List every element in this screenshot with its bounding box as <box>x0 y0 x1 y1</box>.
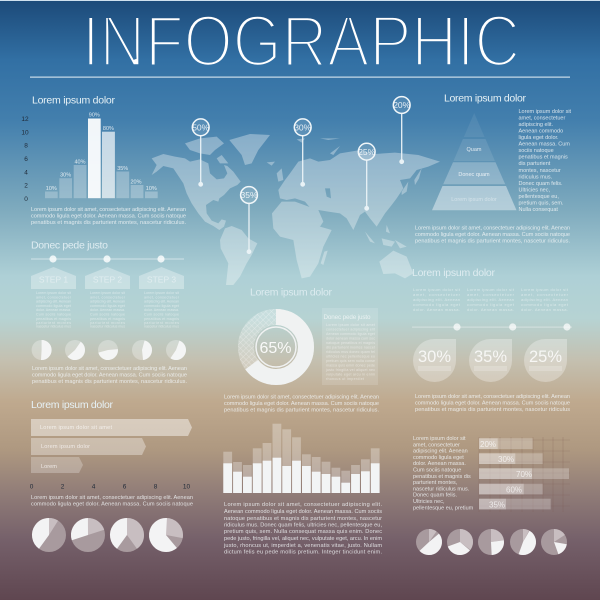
arrow 2 <box>31 438 146 455</box>
bar labels: 90% <box>89 112 100 118</box>
step 2: Cum sociis natoque <box>90 312 125 316</box>
bar labels <box>46 112 157 192</box>
side text: Ultricies nec, <box>413 499 445 505</box>
timeline <box>31 255 184 263</box>
pin: 50%: 50% <box>192 122 210 132</box>
step 1: penatibus et magnis <box>36 317 71 321</box>
side text: Cum sociis natoque <box>413 468 461 474</box>
x axis: 6 <box>123 484 127 490</box>
text block: commodo ligula eget dolor. Aenean massa. Cum sociis natoque <box>32 372 187 378</box>
callout box: Lorem ipsum dolor sit amet <box>326 323 375 327</box>
y axis: 8 <box>24 143 28 150</box>
arrow 3 <box>31 457 83 473</box>
text block: Lorem ipsum dolor sit amet, consectetuer adipiscing elit. Aenean <box>31 207 186 213</box>
callout box: Aenean commodo ligula eget <box>326 332 375 336</box>
text block: Lorem ipsum dolor sit amet, consectetuer adipiscing elit. <box>224 502 382 508</box>
columns text: commodo ligula eget <box>413 302 461 307</box>
text block: penatibus et magnis dis parturient montes, nascetur ridiculus. <box>224 407 379 413</box>
text block: Lorem ipsum dolor sit amet, consectetuer adipiscing elit. Aenean <box>224 394 379 400</box>
step 1: Lorem ipsum dolor sit <box>36 291 71 295</box>
step 3: Cum sociis natoque <box>144 312 179 316</box>
text block: Lorem ipsum dolor sit amet, consectetuer adipiscing elit. Aenean <box>31 495 193 501</box>
pin: 50% <box>192 119 210 187</box>
y axis <box>21 116 29 203</box>
text block: penatibus et magnis dis parturient montes, nascetur ridiculus. <box>415 238 570 244</box>
drop: 30% <box>413 339 456 382</box>
text block: pede justo, fringilla vel, aliquet nec, vulputate eget, arcu. In enim <box>224 536 382 542</box>
columns text: Lorem ipsum dolor sit <box>521 287 569 292</box>
columns text: adipiscing elit. Aenean <box>467 297 514 302</box>
text block <box>32 366 187 385</box>
text block: commodo ligula eget dolor. Aenean massa. Cum sociis natoque <box>224 401 379 407</box>
step 1 <box>31 267 76 329</box>
y axis: 0 <box>24 196 28 203</box>
bar labels: 10% <box>46 186 57 192</box>
callout box <box>322 308 378 385</box>
drop: 30%: 30% <box>418 348 451 366</box>
bars: 70% <box>516 470 532 479</box>
side text: penatibus et magnis dis <box>413 474 471 480</box>
callout box: massa quis enim donec pede <box>326 364 375 368</box>
columns text: Lorem ipsum dolor sit <box>467 287 515 292</box>
step 2: STEP 2 <box>93 274 122 284</box>
panel: horizontal bars <box>413 436 570 555</box>
step 1: dolor. Aenean massa. <box>36 308 71 312</box>
callout box: dis parturient montes nascet <box>326 346 375 350</box>
panel: stacked bars <box>223 424 382 556</box>
side text: pellentesque eu, pretium <box>413 505 474 511</box>
panel: bar chart <box>21 94 186 226</box>
x axis: 0 <box>30 484 34 490</box>
side text: amet, consectetuer <box>413 442 460 448</box>
world map <box>152 134 440 285</box>
callout box: ridiculus mus donec quam fel <box>326 350 375 354</box>
side text: sociis natoque <box>518 148 554 154</box>
text block: Aenean commodo ligula eget dolor. Aenean massa. Cum sociis <box>224 509 382 515</box>
text block: Lorem ipsum dolor sit amet, consectetuer adipiscing elit. Aenean <box>32 366 187 372</box>
pie row <box>416 529 567 555</box>
text block <box>31 495 193 507</box>
map pins <box>192 97 411 254</box>
side text: montes, nascetur <box>518 168 561 174</box>
side text: ligula eget dolor. <box>518 135 559 141</box>
heading: Lorem ipsum dolor <box>31 399 114 411</box>
columns text: commodo ligula eget <box>521 302 569 307</box>
columns text: amet, consectetuer <box>467 292 515 297</box>
columns text: adipiscing elit. Aenean <box>413 297 460 302</box>
arrow 3: Lorem <box>41 464 57 470</box>
side text: pretium quis, sem. <box>518 200 564 206</box>
step 2: penatibus et magnis <box>90 317 125 321</box>
pin: 20% <box>393 97 411 164</box>
text block: penatibus et magnis dis parturient montes, nascetur ridiculus. <box>32 379 187 385</box>
bar labels: 20% <box>130 180 142 186</box>
x axis: 8 <box>154 484 158 490</box>
columns text: Lorem ipsum dolor sit <box>413 287 461 292</box>
step 2: adipiscing elit. Aenean <box>90 300 125 304</box>
large pies <box>32 518 183 552</box>
text block: commodo ligula eget dolor. Aenean massa. Cum sociis natoque <box>415 232 570 238</box>
step 1: nascetur ridiculus mus <box>36 325 71 329</box>
step 3: parturient montes <box>144 321 179 325</box>
bars <box>479 438 569 510</box>
y axis: 10 <box>21 129 29 136</box>
step 3: STEP 3 <box>147 274 176 284</box>
panel: drops <box>412 267 572 413</box>
columns text: amet, consectetuer <box>413 292 461 297</box>
callout box: dolor aenean massa cum soc <box>326 336 375 340</box>
bar labels: 80% <box>103 126 114 132</box>
side text: Donec quam felis. <box>413 493 457 499</box>
y axis: 2 <box>24 183 28 190</box>
heading: Lorem ipsum dolor <box>444 92 526 104</box>
step 2: amet, consectetuer <box>90 295 126 299</box>
side text: Lorem ipsum dolor sit <box>518 109 572 115</box>
side text: dolor. Aenean massa. <box>413 461 466 467</box>
pin: 30% <box>294 119 312 187</box>
y axis: 6 <box>24 156 28 163</box>
bars <box>45 118 158 198</box>
step 1: adipiscing elit. Aenean <box>36 300 71 304</box>
side text: ridiculus mus. <box>518 174 553 180</box>
step 3: commodo ligula eget <box>144 304 179 308</box>
pin: 25% <box>358 143 376 211</box>
text block: penatibus et magnis dis parturient montes, nascetur ridiculus. <box>31 220 186 226</box>
text block <box>31 207 186 226</box>
bar labels: 30% <box>60 172 71 178</box>
grid <box>479 437 570 512</box>
drop: 25% <box>524 339 567 382</box>
side text <box>518 109 572 213</box>
callout box: rhoncus ut imperdiet <box>326 377 364 381</box>
step 3: amet, consectetuer <box>144 295 180 299</box>
x axis: 10 <box>183 484 190 490</box>
y axis: 12 <box>21 116 29 123</box>
pin: 35%: 35% <box>240 190 258 200</box>
side text: commodo ligula eget <box>413 455 464 461</box>
side text: Aenean massa. Cum <box>518 142 570 148</box>
columns text: adipiscing elit. Aenean <box>521 297 568 302</box>
text block <box>415 226 570 244</box>
arrow 1: Lorem ipsum dolor sit amet <box>40 425 112 431</box>
step 3: Lorem ipsum dolor sit <box>144 291 179 295</box>
columns text: dolor. Aenean massa. <box>467 307 514 312</box>
side text: Lorem ipsum dolor sit <box>413 436 466 442</box>
x axis <box>30 484 190 490</box>
pin: 35% <box>240 187 258 254</box>
heading: Donec pede justo <box>31 240 108 252</box>
step 2: parturient montes <box>90 321 125 325</box>
step 1: parturient montes <box>36 321 71 325</box>
text block: commodo ligula eget dolor. Aenean massa. Cum sociis natoque <box>31 501 193 507</box>
step 2: nascetur ridiculus mus <box>90 325 125 329</box>
text block: Lorem ipsum dolor sit amet, consectetuer adipiscing elit. Aenean <box>415 226 570 232</box>
callout box: pretium quis sem nulla conse <box>326 359 375 363</box>
step 2: commodo ligula eget <box>90 304 125 308</box>
bar labels: 40% <box>74 160 86 166</box>
columns text: dolor. Aenean massa. <box>413 307 460 312</box>
text block: pretium quis, sem. Nulla consequat massa quis enim. Donec <box>224 529 382 535</box>
step 3: adipiscing elit. Aenean <box>144 300 179 304</box>
panel: donut <box>224 286 379 413</box>
panel: arrow bars <box>30 399 193 552</box>
arrow 1 <box>31 419 192 436</box>
pyramid chart <box>432 113 516 210</box>
bars: 35% <box>489 500 505 510</box>
heading: Lorem ipsum dolor <box>250 286 332 298</box>
drop: 35% <box>469 339 512 382</box>
bars: 20% <box>480 440 496 449</box>
callout box: consectetuer adipiscing elit <box>326 328 375 332</box>
side text: dis parturient <box>518 161 551 167</box>
donut chart: 65% <box>259 340 292 357</box>
side text: pellentesque eu, <box>518 194 559 200</box>
text block <box>415 394 570 413</box>
panel: pyramid <box>415 92 572 244</box>
callout box: natoque penatibus et magnis <box>326 341 375 345</box>
text block: justo, rhoncus ut, imperdiet a, venenatis vitae, justo. Nullam <box>223 543 382 549</box>
panel: steps <box>31 240 187 385</box>
step 1: Cum sociis natoque <box>36 312 71 316</box>
side text: amet, consectetuer <box>518 116 565 122</box>
step 3 <box>139 267 184 329</box>
side text: adipiscing elit. <box>518 122 554 128</box>
pin: 25%: 25% <box>358 147 376 157</box>
bars: 30% <box>498 455 514 464</box>
pyramid chart: Quam <box>467 147 482 153</box>
step 1: amet, consectetuer <box>36 295 72 299</box>
side text: penatibus et magnis <box>518 155 568 161</box>
columns text <box>413 287 569 312</box>
text block: natoque penatibus et magnis dis parturient montes, nascetur <box>224 516 382 522</box>
step 1: STEP 1 <box>39 274 68 284</box>
side text: parturient montes, <box>413 480 458 486</box>
step 3: penatibus et magnis <box>144 317 179 321</box>
text block: penatibus et magnis dis parturient montes, nascetur ridiculus <box>415 407 570 413</box>
title: INFOGRAPHIC <box>82 2 520 82</box>
step 3: nascetur ridiculus mus <box>144 325 179 329</box>
pie row <box>32 340 186 360</box>
pyramid chart: Donec quam <box>458 172 490 178</box>
text block: commodo ligula eget dolor. Aenean massa. Cum sociis natoque <box>31 213 186 219</box>
step 3: dolor. Aenean massa. <box>144 308 179 312</box>
side text: Ultricies nec, <box>518 187 550 193</box>
text block: commodo ligula eget dolor. Aenean massa. Cum sociis natoque <box>415 400 570 406</box>
arrow 2: Lorem ipsum dolor <box>41 444 90 450</box>
side text: Aenean commodo <box>518 129 563 135</box>
heading: Lorem ipsum dolor <box>32 94 116 106</box>
step 2 <box>85 267 130 329</box>
callout box: Donec pede justo <box>324 314 371 321</box>
bar labels: 10% <box>146 186 157 192</box>
pin: 30%: 30% <box>294 122 312 132</box>
text block <box>224 394 379 413</box>
text block: Lorem ipsum dolor sit amet, consectetuer adipiscing elit. Aenean <box>415 394 570 400</box>
y axis: 4 <box>24 169 28 176</box>
bar labels: 35% <box>117 166 128 172</box>
pin: 20%: 20% <box>393 100 411 110</box>
columns text: dolor. Aenean massa. <box>521 307 568 312</box>
heading: Lorem ipsum dolor <box>412 267 496 279</box>
bars: 60% <box>506 486 522 494</box>
text block: dictum felis eu pede mollis pretium. Integer tincidunt enim. <box>224 550 382 556</box>
side text <box>413 436 474 511</box>
step 1: commodo ligula eget <box>36 304 71 308</box>
x axis: 4 <box>92 484 96 490</box>
callout box: ultricies nec pellentesque eu <box>326 354 375 358</box>
drop: 25%: 25% <box>529 348 562 366</box>
timeline <box>412 323 572 331</box>
pyramid chart: Lorem ipsum dolor <box>451 197 497 203</box>
text block <box>223 502 382 556</box>
text block: ridiculus mus. Donec quam felis, ultricies nec, pellentesque eu, <box>224 522 382 528</box>
x axis: 2 <box>61 484 65 490</box>
step 2: dolor. Aenean massa. <box>90 308 125 312</box>
callout box: justo fringilla vel aliquet nec <box>325 368 375 372</box>
side text: Nulla consequat <box>518 207 558 213</box>
step 2: Lorem ipsum dolor sit <box>90 291 125 295</box>
side text: nascetur ridiculus mus. <box>413 486 470 492</box>
side text: adipiscing elit. Aenean <box>413 449 468 455</box>
columns text: amet, consectetuer <box>521 292 569 297</box>
chart <box>223 424 380 493</box>
drop: 35%: 35% <box>474 348 507 366</box>
donut chart <box>246 317 306 377</box>
side text: Donec quam felis. <box>518 181 563 187</box>
callout box: vulputate eget arcu in enim <box>326 372 375 376</box>
columns text: commodo ligula eget <box>467 302 515 307</box>
